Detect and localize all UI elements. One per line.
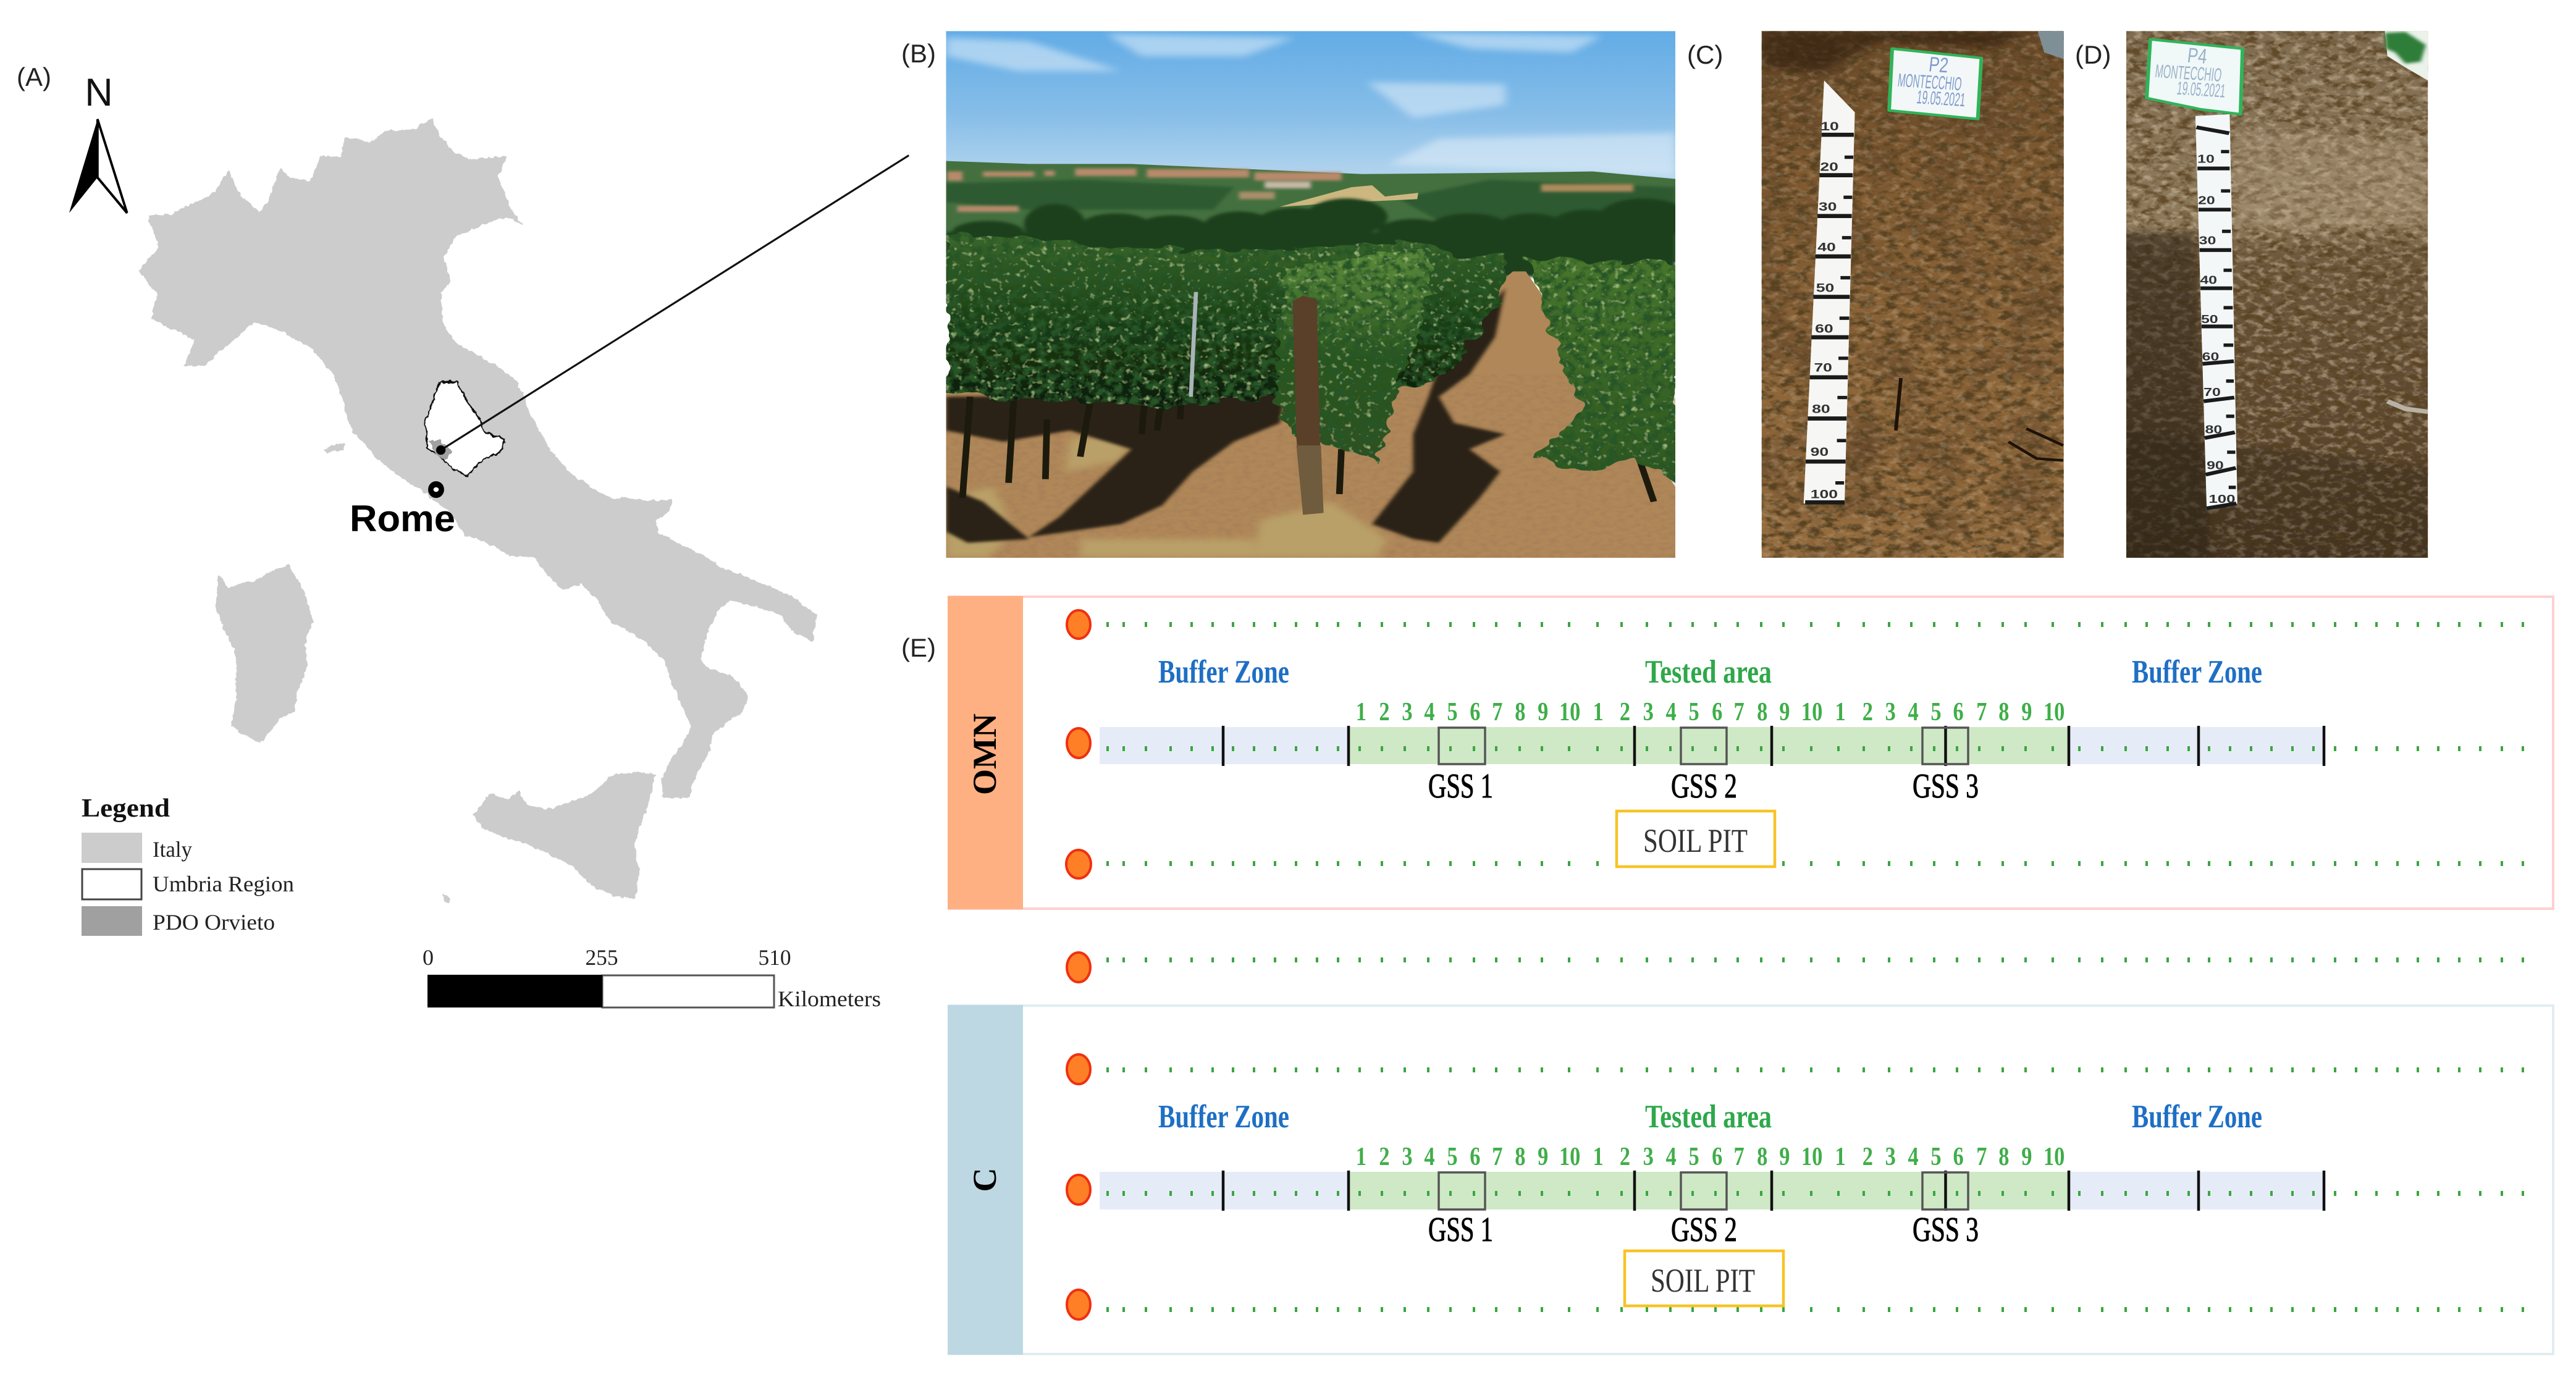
C strip label: C: [966, 1167, 1003, 1192]
vine numbers: 4: [1908, 1143, 1919, 1171]
tape numbers: 10: [2197, 153, 2215, 166]
label: Rome: Rome: [350, 498, 455, 539]
vine numbers: 2: [1620, 1143, 1630, 1171]
photo vine trunks: [962, 374, 1654, 502]
vine row 3 dots: [1108, 861, 2523, 866]
vine numbers: 3: [1643, 698, 1654, 726]
vine numbers: 1: [1356, 1143, 1366, 1171]
tested band: [1349, 727, 2069, 764]
vine numbers: 8: [1757, 698, 1767, 726]
tape numbers: 60: [2202, 350, 2219, 363]
zone heading right buffer: Buffer Zone: [2132, 654, 2262, 690]
zone heading left buffer: Buffer Zone: [1158, 654, 1289, 690]
tape numbers: 100: [2208, 492, 2236, 505]
OMN side strip: [948, 596, 1023, 909]
GSS 2 label: GSS 2: [1671, 1211, 1737, 1249]
panel C: soil profile photo P2: [1762, 31, 2064, 558]
vine numbers: 7: [1733, 698, 1745, 726]
row marker 3: [1066, 850, 1091, 878]
photo clouds: [946, 32, 1675, 176]
photo center vine: [1275, 247, 1434, 464]
legend text: PDO Orvieto: PDO Orvieto: [153, 910, 275, 935]
site tag P2: 19.05.2021: [1916, 86, 1967, 111]
vine numbers: 10: [1559, 698, 1580, 726]
map: Italy land masses: [139, 119, 817, 903]
panel D: soil profile photo P4: [2121, 31, 2433, 562]
root: [2388, 402, 2428, 412]
soil pit label: SOIL PIT: [1643, 822, 1748, 859]
vine numbers: 7: [1733, 1143, 1745, 1171]
site tag P4: [2147, 40, 2242, 114]
leaves in corner: [2385, 31, 2428, 80]
vine numbers: 9: [1779, 698, 1790, 726]
vine numbers: 1: [1835, 698, 1846, 726]
row marker 1: [1067, 610, 1090, 639]
soil texture dark: [2126, 31, 2428, 558]
scale bar: [423, 945, 881, 1011]
legend swatch: Umbria: [82, 869, 141, 899]
GSS sampling box 3: [1922, 728, 1968, 764]
vine numbers: 3: [1885, 698, 1896, 726]
scale unit: Kilometers: [778, 986, 881, 1011]
vine numbers: 6: [1712, 698, 1722, 726]
buffer band right: [2069, 727, 2324, 764]
GSS 3 label: GSS 3: [1913, 767, 1979, 805]
panel C: soil profile photo P2: MONTECCHIO: [1896, 69, 1963, 95]
vine row 1 dots: [1108, 1067, 2523, 1072]
vine numbers: 1: [1593, 698, 1604, 726]
legend text: Umbria: Umbria Region: [153, 872, 294, 896]
soil crack: [1896, 378, 2063, 460]
scale label 255: 255: [586, 945, 618, 970]
tape numbers: 40: [1817, 240, 1836, 254]
panel label C: (C): [1687, 40, 1723, 69]
buffer band right: [2069, 1172, 2324, 1209]
tape numbers: 20: [1820, 160, 1838, 174]
photo distant hills: [946, 161, 1675, 262]
dark lower band: [2121, 431, 2433, 562]
vine numbers: 7: [1492, 1143, 1503, 1171]
vine numbers: 2: [1620, 698, 1630, 726]
pale upper horizon: [2236, 127, 2428, 229]
vine numbers: 3: [1402, 698, 1413, 726]
OMN strip label: OMN: [966, 713, 1003, 795]
marker: study site: [436, 445, 445, 455]
panel B: vineyard photo: [946, 31, 1690, 558]
vine numbers: 5: [1447, 698, 1458, 726]
measuring tape: [1804, 80, 1855, 503]
photo tree line: [946, 198, 1690, 277]
tested band: [1349, 1172, 2069, 1209]
vine row 3 dots: [1108, 1307, 2523, 1312]
photo metal stake: [1191, 292, 1196, 397]
tape graduations: [1805, 135, 1854, 502]
vine numbers: 6: [1953, 698, 1964, 726]
row marker 2: [1067, 728, 1090, 758]
vine numbers: 8: [1998, 698, 2010, 726]
tape numbers: 50: [2201, 313, 2218, 326]
tape numbers: 70: [2203, 385, 2221, 398]
GSS sampling box 1: [1439, 728, 1485, 764]
soil background: [1762, 31, 2064, 558]
GSS sampling box 1: [1439, 1172, 1485, 1209]
vine numbers: 5: [1688, 1143, 1699, 1171]
buffer band left: [1100, 727, 1349, 764]
vine numbers: 10: [1801, 1143, 1822, 1171]
vine numbers: 4: [1666, 1143, 1677, 1171]
vine numbers: 7: [1976, 1143, 1987, 1171]
vine numbers: 9: [2021, 1143, 2032, 1171]
tape numbers: 60: [1815, 322, 1833, 335]
C panel frame: [949, 1006, 2553, 1354]
north arrow: [69, 119, 127, 213]
measuring tape: [2195, 114, 2237, 508]
tape half marks: [1835, 158, 1853, 483]
photo right vine row: [1527, 256, 1680, 483]
vine numbers: 9: [1538, 1143, 1548, 1171]
panel label A: (A): [17, 62, 51, 91]
north arrow letter: N: [85, 71, 113, 114]
photo left vine rows: [946, 234, 1508, 408]
zone heading left buffer: Buffer Zone: [1158, 1099, 1289, 1135]
photo hill shading: [946, 180, 1675, 221]
vine numbers: 6: [1953, 1143, 1964, 1171]
vine numbers: 9: [1779, 1143, 1790, 1171]
soil pit box: [1617, 811, 1775, 867]
vine numbers: 5: [1930, 1143, 1942, 1171]
vine numbers: 3: [1885, 1143, 1896, 1171]
OMN panel frame: [949, 597, 2553, 909]
vine numbers: [1356, 1143, 2065, 1171]
vine numbers: 6: [1470, 698, 1480, 726]
map: Umbria region: [426, 382, 503, 474]
legend: [82, 794, 294, 936]
vine numbers: 2: [1379, 1143, 1390, 1171]
tape numbers: 30: [2199, 234, 2216, 247]
soil pit box: [1625, 1251, 1783, 1306]
soil background: [2126, 31, 2428, 558]
plot boundaries: [1223, 1171, 2324, 1211]
legend swatch: Italy: [82, 833, 142, 863]
tape numbers: [1811, 119, 1839, 501]
vine numbers: 2: [1863, 1143, 1873, 1171]
vine numbers: 2: [1863, 698, 1873, 726]
soil texture light: [2126, 31, 2428, 558]
soil texture dark: [1762, 31, 2064, 558]
vine numbers: 1: [1835, 1143, 1846, 1171]
tape numbers: 10: [1820, 119, 1839, 133]
vine numbers: 4: [1424, 1143, 1435, 1171]
panel A: map of Italy: [69, 119, 909, 903]
vine numbers: 6: [1470, 1143, 1480, 1171]
panel E: control treatment: [948, 1005, 2553, 1355]
map: Italy mainland: [139, 119, 817, 797]
panel label E: (E): [901, 633, 936, 662]
GSS sampling box 2: [1681, 728, 1727, 764]
tape numbers: 90: [1811, 445, 1829, 458]
tape numbers: 80: [2205, 423, 2222, 436]
sky corner: [2038, 31, 2064, 59]
row marker 3: [1067, 1290, 1090, 1319]
tape numbers: 20: [2198, 194, 2215, 206]
photo sky: [946, 31, 1675, 181]
vine numbers: 1: [1593, 1143, 1604, 1171]
panel label D: (D): [2075, 40, 2111, 69]
zone heading tested area: Tested area: [1645, 654, 1772, 690]
dark left flank: [2121, 232, 2211, 562]
vine row 2 dots: [1108, 746, 2523, 751]
vine numbers: 9: [2021, 698, 2032, 726]
vine numbers: 7: [1492, 698, 1503, 726]
tape numbers: 90: [2207, 459, 2224, 471]
soil texture light: [1762, 31, 2064, 558]
tape numbers: 70: [1814, 361, 1832, 374]
tape numbers: 40: [2200, 274, 2217, 287]
GSS 2 label: GSS 2: [1671, 767, 1737, 805]
scale bar white segment: [602, 975, 774, 1007]
site tag P2: [1889, 49, 1981, 119]
panel label B: (B): [901, 39, 936, 68]
legend swatch: PDO Orvieto: [82, 906, 142, 936]
vine numbers: 8: [1757, 1143, 1767, 1171]
tape half marks: [2221, 151, 2236, 487]
photo wooden post: [1293, 296, 1323, 515]
vine numbers: 10: [2044, 1143, 2065, 1171]
soil broad shading: [1762, 31, 2064, 558]
tape numbers: 80: [1812, 402, 1830, 416]
photo dry grass: [946, 436, 1387, 558]
vine numbers: 3: [1643, 1143, 1654, 1171]
map: Sicily: [473, 773, 656, 898]
buffer band left: [1100, 1172, 1349, 1209]
top clods shadow: [1762, 31, 2026, 71]
tape numbers: 50: [1816, 281, 1834, 295]
vine numbers: 1: [1356, 698, 1366, 726]
map: small islands: [324, 442, 450, 903]
scale label 0: 0: [423, 945, 434, 970]
photo ground: [946, 271, 1675, 558]
GSS sampling box 3: [1922, 1172, 1968, 1209]
site tag P4: MONTECCHIO: [2154, 61, 2223, 86]
photo hill town: [947, 169, 1633, 212]
photo wheat field: [1280, 185, 1418, 207]
tag text: [2154, 43, 2227, 101]
vine numbers: 10: [1559, 1143, 1580, 1171]
vine numbers: 8: [1515, 1143, 1525, 1171]
separating vine row between panels: [1067, 953, 2523, 982]
vine numbers: 8: [1515, 698, 1525, 726]
C side strip: [948, 1005, 1023, 1355]
GSS 3 label: GSS 3: [1913, 1211, 1979, 1249]
row marker 2: [1067, 1175, 1090, 1205]
vine numbers: 10: [2044, 698, 2065, 726]
vine row 2 dots: [1108, 1191, 2523, 1196]
vine numbers: 4: [1908, 698, 1919, 726]
scale label 510: 510: [759, 945, 791, 970]
tag text: P4: [2186, 43, 2208, 68]
vine numbers: 9: [1538, 698, 1548, 726]
vine numbers: 2: [1379, 698, 1390, 726]
vine numbers: 4: [1424, 698, 1435, 726]
row dots: [1108, 957, 2523, 962]
row marker 1: [1067, 1054, 1090, 1084]
vine numbers: [1356, 698, 2065, 726]
photo dark row shadows: [946, 288, 1505, 543]
vine numbers: 6: [1712, 1143, 1722, 1171]
photo post lower part: [1297, 445, 1323, 515]
tape numbers: [2197, 153, 2236, 505]
scale bar black segment: [427, 975, 602, 1007]
row marker: [1067, 953, 1090, 982]
GSS sampling box 2: [1681, 1172, 1727, 1209]
vine numbers: 5: [1688, 698, 1699, 726]
marker: Rome: [431, 484, 442, 495]
vine numbers: 3: [1402, 1143, 1413, 1171]
site tag P4: 19.05.2021: [2176, 77, 2227, 101]
legend title: Legend: [82, 794, 170, 823]
map: PDO Orvieto area: [429, 440, 452, 460]
zone heading right buffer: Buffer Zone: [2132, 1099, 2262, 1135]
plot boundaries: [1223, 726, 2324, 766]
tape numbers: 30: [1819, 200, 1837, 213]
panel E: OMN treatment: [948, 596, 2553, 909]
map: Sardinia: [216, 565, 312, 741]
vine numbers: 4: [1666, 698, 1677, 726]
legend text: Italy: Italy: [153, 837, 192, 862]
GSS 1 label: GSS 1: [1428, 1211, 1493, 1249]
soil pit label: SOIL PIT: [1651, 1262, 1755, 1299]
vine numbers: 7: [1976, 698, 1987, 726]
vine numbers: 10: [1801, 698, 1822, 726]
vine row 1 dots: [1108, 622, 2523, 627]
vine numbers: 8: [1998, 1143, 2010, 1171]
tag text: P2: [1927, 53, 1950, 77]
photo ground texture: [946, 374, 1675, 558]
vine numbers: 5: [1447, 1143, 1458, 1171]
vine numbers: 5: [1930, 698, 1942, 726]
tape numbers: 100: [1811, 487, 1838, 501]
tape graduations: [2197, 127, 2236, 508]
GSS 1 label: GSS 1: [1428, 767, 1493, 805]
tag text: [1896, 53, 1967, 111]
zone heading tested area: Tested area: [1645, 1099, 1772, 1135]
leader line to vineyard photo: [441, 156, 909, 450]
